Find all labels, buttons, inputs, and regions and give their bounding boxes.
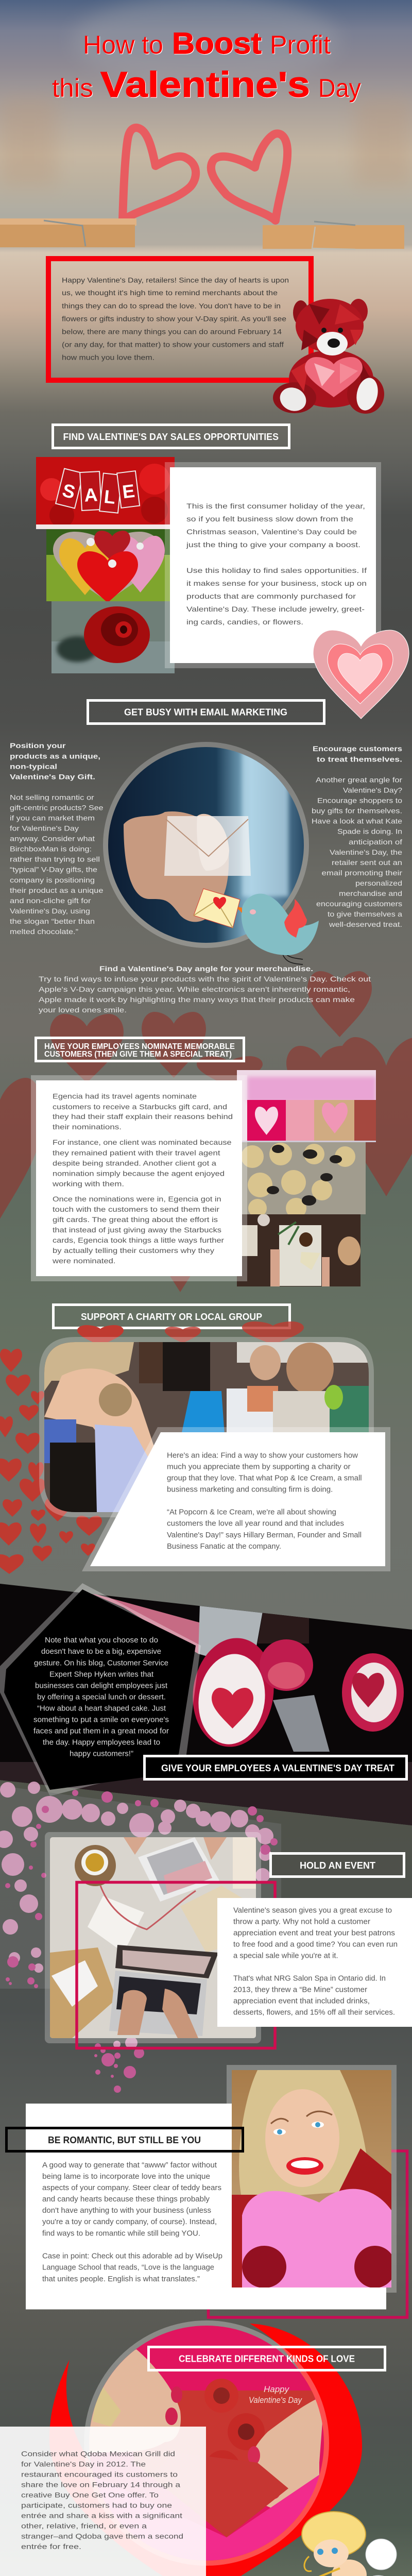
title: this <box>52 74 93 103</box>
panel: hold an event: to free food and a good time? You can even run <box>233 1940 398 1948</box>
envelope overlay <box>164 816 251 876</box>
text block: position your products: for Valentine's Day <box>10 824 79 833</box>
sale tag L: L <box>103 486 116 508</box>
heading: give employees a treat: GIVE YOUR EMPLOYEES A VALENTINE'S DAY TREAT <box>161 1763 394 1773</box>
panel: nominate customers: Once the nominations were in, Egencia got in <box>53 1195 221 1203</box>
text block: position your products: their product as a unique <box>10 886 104 894</box>
panel: Qdoba: creative Buy One Get One offer. To <box>21 2491 159 2499</box>
second candy <box>260 1639 313 1691</box>
panel: note on small gestures: Note that what you choose to do <box>45 1636 158 1645</box>
photo: snowman cupcakes <box>241 1142 366 1218</box>
photo: pink gift bags <box>237 1070 376 1142</box>
panel: charity idea <box>82 1427 390 1571</box>
love letter <box>194 889 240 928</box>
bird body <box>242 894 319 955</box>
text block: find a Valentine's angle: Apple's V-Day campaign this year. While electronics aren't inherently romantic, <box>39 985 350 993</box>
text block: position your products: gift-centric products? See <box>10 804 104 812</box>
panel: hold an event <box>217 1898 412 2027</box>
decoration: red brush heart <box>49 2324 362 2576</box>
heading: support a charity: SUPPORT A CHARITY OR LOCAL GROUP <box>81 1312 262 1322</box>
icon: layered pink heart <box>313 630 409 719</box>
text block: find a Valentine's angle <box>39 964 371 1014</box>
panel: nominate customers: Egencia had its travel agents nominate <box>53 1092 197 1100</box>
charity: blonde woman <box>44 1342 134 1391</box>
title: Boost <box>172 27 262 60</box>
panel: hold an event: appreciation event and treat your best patrons <box>233 1929 395 1937</box>
bird feet <box>282 953 303 964</box>
text block: position your products: Valentine's Day, using <box>10 907 90 915</box>
laptop <box>115 1945 218 1978</box>
red top <box>330 2148 391 2210</box>
panel: be romantic: don't have anything to with your business (unless <box>42 2206 211 2215</box>
right wire heart <box>211 133 287 221</box>
panel: sales opportunities: so if you felt business slow down from the <box>186 515 353 523</box>
panel: be romantic: A good way to generate that “awww” factor without <box>42 2161 217 2170</box>
text block: encourage customers: retailer sent out an <box>332 858 402 867</box>
panel: hold an event: That's what NRG Salon Spa in Ontario did. In <box>233 1974 386 1982</box>
panel: be romantic: Case in point: Check out this adorable ad by WiseUp <box>42 2252 222 2261</box>
lips <box>286 2157 323 2175</box>
text block: find a Valentine's angle: Find a Valentine's Day angle for your merchandise. <box>99 964 313 973</box>
panel: nominate customers: cards, Egencia took things a little ways further <box>53 1236 224 1244</box>
text block: position your products: company is positioning <box>10 876 95 884</box>
text block: position your products: melted chocolate.” <box>10 927 78 936</box>
teddy heart <box>305 357 363 397</box>
text block: encourage customers: anticipation of <box>349 838 402 846</box>
heading: hold an event <box>271 1854 404 1876</box>
panel: hold an event: 2013, they threw a “Be Mine” customer <box>233 1985 367 1994</box>
icon: blue bird with love letter <box>194 889 319 964</box>
panel: charity idea: business marketing and consulting firm is doing. <box>167 1485 333 1494</box>
panel: Qdoba: restaurant encouraged its customers to <box>21 2470 178 2479</box>
teddy feet <box>276 383 310 415</box>
text block: encourage customers: Have a look at what Kate <box>312 817 402 825</box>
panel: sales opportunities: This is the first consumer holiday of the year, <box>186 502 365 510</box>
panel: charity idea: customers the love all year round and that includes <box>167 1519 344 1528</box>
panel: note on small gestures: faces and put them in a great mood for <box>33 1727 169 1736</box>
panel: nominate customers: despite being stranded. Another client got a <box>53 1159 216 1167</box>
intro panel: things they can do to spread the love. You don't have to be in <box>62 302 281 310</box>
package and ribbon <box>180 1886 256 1953</box>
panel: sales opportunities: products that are commonly purchased for <box>186 592 356 600</box>
decoration: red heart shower <box>0 1321 304 1574</box>
decoration: pink bubbles <box>0 1782 281 2093</box>
heading: give employees a treat <box>144 1756 407 1780</box>
panel: Qdoba: for Valentine's Day in 2012. The <box>21 2460 146 2468</box>
text block: find a Valentine's angle: your loved ones smile. <box>39 1006 127 1014</box>
text block: position your products: rather than trying to sell <box>10 855 100 863</box>
photo: red rose <box>52 601 175 673</box>
panel: hold an event: Valentine's season gives you a great excuse to <box>233 1906 392 1914</box>
photo: desk with tablet and laptop <box>45 1832 261 2043</box>
title: Profit <box>270 30 331 59</box>
panel: nominate customers: touch with the customers to send them their <box>53 1205 219 1213</box>
panel: charity idea: Business Fanatic at the company. <box>167 1542 281 1551</box>
heading: find sales opportunities: FIND VALENTINE'S DAY SALES OPPORTUNITIES <box>63 432 279 442</box>
panel: charity idea: “At Popcorn & Ice Cream, we're all about showing <box>167 1508 336 1517</box>
left wire heart <box>123 128 196 221</box>
main candy <box>193 1638 274 1747</box>
photo: woman with pink heart <box>227 2065 397 2293</box>
panel: Qdoba: share the love on February 14 through a <box>21 2481 180 2489</box>
panel: Qdoba: stranger–and Qdoba gave them a second <box>21 2532 183 2540</box>
panel: nominate customers: were nominated. <box>52 1257 115 1265</box>
title: Day <box>318 74 361 103</box>
panel: nominate customers <box>31 1075 247 1281</box>
intro panel: Happy Valentine's Day, retailers! Since the day of hearts is upon <box>62 276 289 284</box>
title: Valentine's <box>100 64 310 105</box>
hand <box>124 811 229 922</box>
hero photo: hearts on clothespins <box>0 0 412 249</box>
text block: encourage customers: to give themselves a <box>328 910 402 918</box>
charity: dark hair centre <box>163 1342 210 1391</box>
panel: Qdoba: participate, customers had to buy one <box>21 2501 172 2510</box>
tea on coaster <box>75 1845 116 1886</box>
panel: Qdoba: entrée for free. <box>21 2542 81 2550</box>
panel: nominate customers: their nominations. <box>53 1123 122 1131</box>
heading: celebrate different kinds of love <box>148 2347 385 2370</box>
panel: nominate customers: they had their staff explain their reasons behind <box>53 1112 233 1121</box>
intro panel: flowers or gifts industry to show your V-Day spirit. As you'll see <box>62 315 286 323</box>
sale tag A: A <box>83 484 98 506</box>
charity: blue bag <box>181 1391 225 1435</box>
panel: Qdoba: other, relative, friend, or even a <box>21 2521 147 2530</box>
text block: encourage customers: Spade is doing. In <box>337 827 402 836</box>
tablet <box>138 1837 219 1902</box>
cupid face <box>314 2539 349 2567</box>
cupid cloth <box>330 2575 394 2576</box>
panel: Qdoba: entrée and share a kiss with a significant <box>21 2511 182 2519</box>
heading: email marketing: GET BUSY WITH EMAIL MARKETING <box>124 707 287 718</box>
text block: encourage customers: Another great angle for <box>316 775 402 784</box>
panel: be romantic: being lame is to incorporate love into the unique <box>42 2172 210 2181</box>
right hand <box>250 2396 324 2512</box>
panel: charity idea: Here's an idea: Find a way to show your customers how <box>167 1451 358 1460</box>
photo: hands holding valentine box <box>84 2320 330 2568</box>
panel: note on small gestures: businesses can delight employees just <box>35 1682 168 1690</box>
charity: child <box>95 1425 148 1512</box>
panel: nominate customers: For instance, one client was nominated because <box>53 1138 232 1146</box>
photo: charity party <box>39 1337 374 1517</box>
hair <box>239 2070 371 2200</box>
photo: hands holding valentine box: Valentine's Day <box>249 2395 302 2405</box>
right candy <box>342 1653 404 1732</box>
intro panel: (or any day, for that matter) to show your customers and staff <box>62 341 284 349</box>
panel: note on small gestures: happy customers!” <box>70 1750 133 1758</box>
charity: boy and woman at right <box>250 1345 281 1380</box>
text block: position your products: non-typical <box>10 762 57 771</box>
photo: wrapped gift <box>237 1214 360 1286</box>
text block: position your products: the slogan “better than <box>10 917 95 925</box>
text block: position your products: Not selling romantic or <box>10 793 94 802</box>
panel: be romantic: you're a toy or candy company, of course). Instead, <box>42 2217 217 2226</box>
knit mittens <box>242 2246 286 2288</box>
panel: hold an event: throw a party. Why not hold a customer <box>233 1918 370 1926</box>
title: How to <box>83 30 163 59</box>
panel: be romantic: and candy hearts because these things probably <box>42 2195 210 2204</box>
cupid hair <box>302 2512 366 2557</box>
panel: charity idea: group that they love. That what Pop & Ice Cream, a small <box>167 1474 362 1483</box>
heading: hold an event: HOLD AN EVENT <box>300 1860 375 1871</box>
text block: encourage customers: Encourage customers <box>313 744 402 753</box>
text block: find a Valentine's angle: Try to find ways to infuse your products with the spirit of Valentine's Day. Check out <box>39 975 371 983</box>
magenta base <box>88 2468 330 2568</box>
panel: note on small gestures: something to put a smile on everyone's <box>33 1716 169 1724</box>
sale tag E <box>117 471 140 508</box>
text block: position your products: products as a unique, <box>10 752 100 760</box>
left hand <box>88 2349 181 2452</box>
icon: polygon teddy bear <box>273 299 384 415</box>
panel: nominate customers: that instead of just giving away the Starbucks <box>53 1226 221 1234</box>
heading: nominate memorable customers <box>36 1038 244 1061</box>
cupid arrow <box>306 2568 340 2576</box>
intro panel <box>48 259 311 380</box>
sale tag S <box>56 468 83 509</box>
panel: Qdoba <box>0 2427 206 2576</box>
photo: felt hearts <box>46 529 170 603</box>
heading: nominate memorable customers: HAVE YOUR EMPLOYEES NOMINATE MEMORABLE <box>44 1042 235 1051</box>
panel: be romantic: find ways to be romantic while still being YOU. <box>42 2229 200 2238</box>
text block: encourage customers: to treat themselves. <box>317 755 402 764</box>
background hearts: scribbled <box>0 971 412 1292</box>
icon: cupid <box>297 2512 397 2576</box>
heading: email marketing <box>88 701 324 723</box>
text block: find a Valentine's angle: Apple made it work by highlighting the many ways that their products can make <box>39 995 355 1004</box>
magenta frame <box>77 1883 275 2048</box>
panel: hold an event: a special sale while you're at it. <box>233 1952 338 1960</box>
panel: nominate customers: by actually telling their customers why they <box>53 1246 214 1255</box>
panel: sales opportunities: it makes sense for your business, stock up on <box>186 579 367 587</box>
text block: encourage customers: encouraging customers <box>316 900 402 908</box>
panel: sales opportunities: just the thing to give your company a boost. <box>186 540 360 549</box>
text block: position your products: and non-cliche gift for <box>10 896 91 905</box>
text block: position your products: anyway. Consider what <box>10 835 95 843</box>
heading: be romantic: BE ROMANTIC, BUT STILL BE YOU <box>48 2135 201 2145</box>
text block: position your products: Position your <box>10 741 66 750</box>
panel: hold an event: desserts, flowers, and 15% off all their services. <box>233 2008 395 2016</box>
panel: note on small gestures: Expert Shep Hyken writes that <box>49 1670 154 1679</box>
heading: celebrate different kinds of love: CELEBRATE DIFFERENT KINDS OF LOVE <box>179 2353 355 2364</box>
hands on keyboard <box>117 1990 147 2035</box>
panel: note on small gestures: by offering a special lunch or dessert. <box>37 1693 166 1701</box>
brown envelope <box>50 1947 116 2038</box>
magenta frame 2 <box>208 2151 407 2317</box>
text block: encourage customers: well-deserved treat. <box>329 920 402 928</box>
text block: position your products <box>10 741 104 936</box>
right clothespin <box>263 222 404 249</box>
panel: Qdoba: Consider what Qdoba Mexican Grill did <box>21 2450 175 2458</box>
panel: note on small gestures: the day. Happy employees lead to <box>43 1738 160 1747</box>
happy valentine's lettering: Happy <box>264 2384 290 2394</box>
text block: encourage customers: email promoting their <box>321 869 402 877</box>
panel: sales opportunities <box>165 462 381 668</box>
text block: encourage customers: Valentine's Day? <box>343 786 402 794</box>
face <box>265 2089 339 2187</box>
panel: nominate customers: customers to receive a Starbucks gift card, and <box>53 1103 227 1111</box>
text block: position your products: Valentine's Day Gift. <box>10 773 95 781</box>
panel: nominate customers: nomination simply because the agent enjoyed <box>53 1169 225 1177</box>
heading: nominate memorable customers: CUSTOMERS (THEN GIVE THEM A SPECIAL TREAT) <box>44 1050 232 1059</box>
panel: sales opportunities: ing cards, candies, or flowers. <box>186 618 303 626</box>
panel: nominate customers: they remained patient with their travel agent <box>53 1148 220 1157</box>
sale tag S: S <box>60 480 77 503</box>
panel: charity idea: Valentine's Day!” says Hillary Berman, Founder and Small <box>167 1531 362 1539</box>
jar glass <box>198 1606 263 1656</box>
text block: encourage customers: merchandise and <box>339 889 402 897</box>
panel: note on small gestures <box>0 1583 201 1796</box>
text block: encourage customers: Valentine's Day, the <box>330 848 402 856</box>
panel: sales opportunities: Valentine's Day. These include jewelry, greet- <box>186 605 365 613</box>
panel: note on small gestures: gesture. On his blog, Customer Service <box>34 1658 168 1667</box>
panel: nominate customers: working with them. <box>52 1179 124 1188</box>
panel: note on small gestures: doesn't have to be a big, expensive <box>41 1647 161 1656</box>
heading: find sales opportunities <box>53 425 289 448</box>
heading: support a charity <box>54 1304 289 1328</box>
intro panel: how much you love them. <box>62 353 154 361</box>
teddy muzzle and face <box>317 332 348 355</box>
panel: note on small gestures: “How about a heart shaped cake. Just <box>37 1704 166 1713</box>
panel: be romantic: Language School that reads, “Love is the language <box>42 2263 214 2272</box>
panel: be romantic: aspects of your company. Steer clear of teddy bears <box>42 2183 221 2192</box>
text block: encourage customers <box>312 744 402 928</box>
panel: sales opportunities: Christmas season, Valentine's Day could be <box>186 528 357 536</box>
text block: encourage customers: personalized <box>355 879 402 887</box>
photo band: heart candies <box>0 1582 412 1829</box>
panel: nominate customers: gift cards. The great thing about the effort is <box>53 1215 218 1224</box>
panel: be romantic: that unites people. English is what translates.” <box>42 2275 200 2283</box>
text block: position your products: “typical” V-Day gifts, the <box>10 866 97 874</box>
candy wrapper <box>273 1695 330 1752</box>
title <box>52 27 361 105</box>
text block: position your products: if you can market them <box>10 814 95 822</box>
text block: encourage customers: Encourage shoppers to <box>317 796 402 805</box>
heading: be romantic <box>6 2128 243 2151</box>
red heart box with roses <box>129 2391 319 2537</box>
pink heart <box>242 2189 391 2287</box>
panel: charity idea: much you appreciate them by supporting a charity or <box>167 1462 351 1471</box>
sale tag L <box>99 473 122 513</box>
bird wing <box>284 899 307 938</box>
panel: hold an event: appreciation event that included drinks, <box>233 1997 370 2005</box>
panel: be romantic <box>26 2104 386 2309</box>
photo: hand tapping email icon <box>103 742 309 948</box>
left clothespin <box>0 218 136 247</box>
big red felt heart <box>77 551 138 603</box>
intro panel: below, there are many things you can do around February 14 <box>62 328 282 336</box>
photo: sale tags <box>36 457 175 529</box>
intro panel: us, we thought it's high time to remind merchants about the <box>62 289 278 297</box>
text block: position your products: BirchboxMan is doing: <box>10 845 92 853</box>
panel: sales opportunities: Use this holiday to find sales opportunities. If <box>186 566 367 574</box>
sale tag A <box>80 471 101 511</box>
text block: encourage customers: buy gifts for themselves. <box>312 807 402 815</box>
sale tag E: E <box>121 480 136 502</box>
